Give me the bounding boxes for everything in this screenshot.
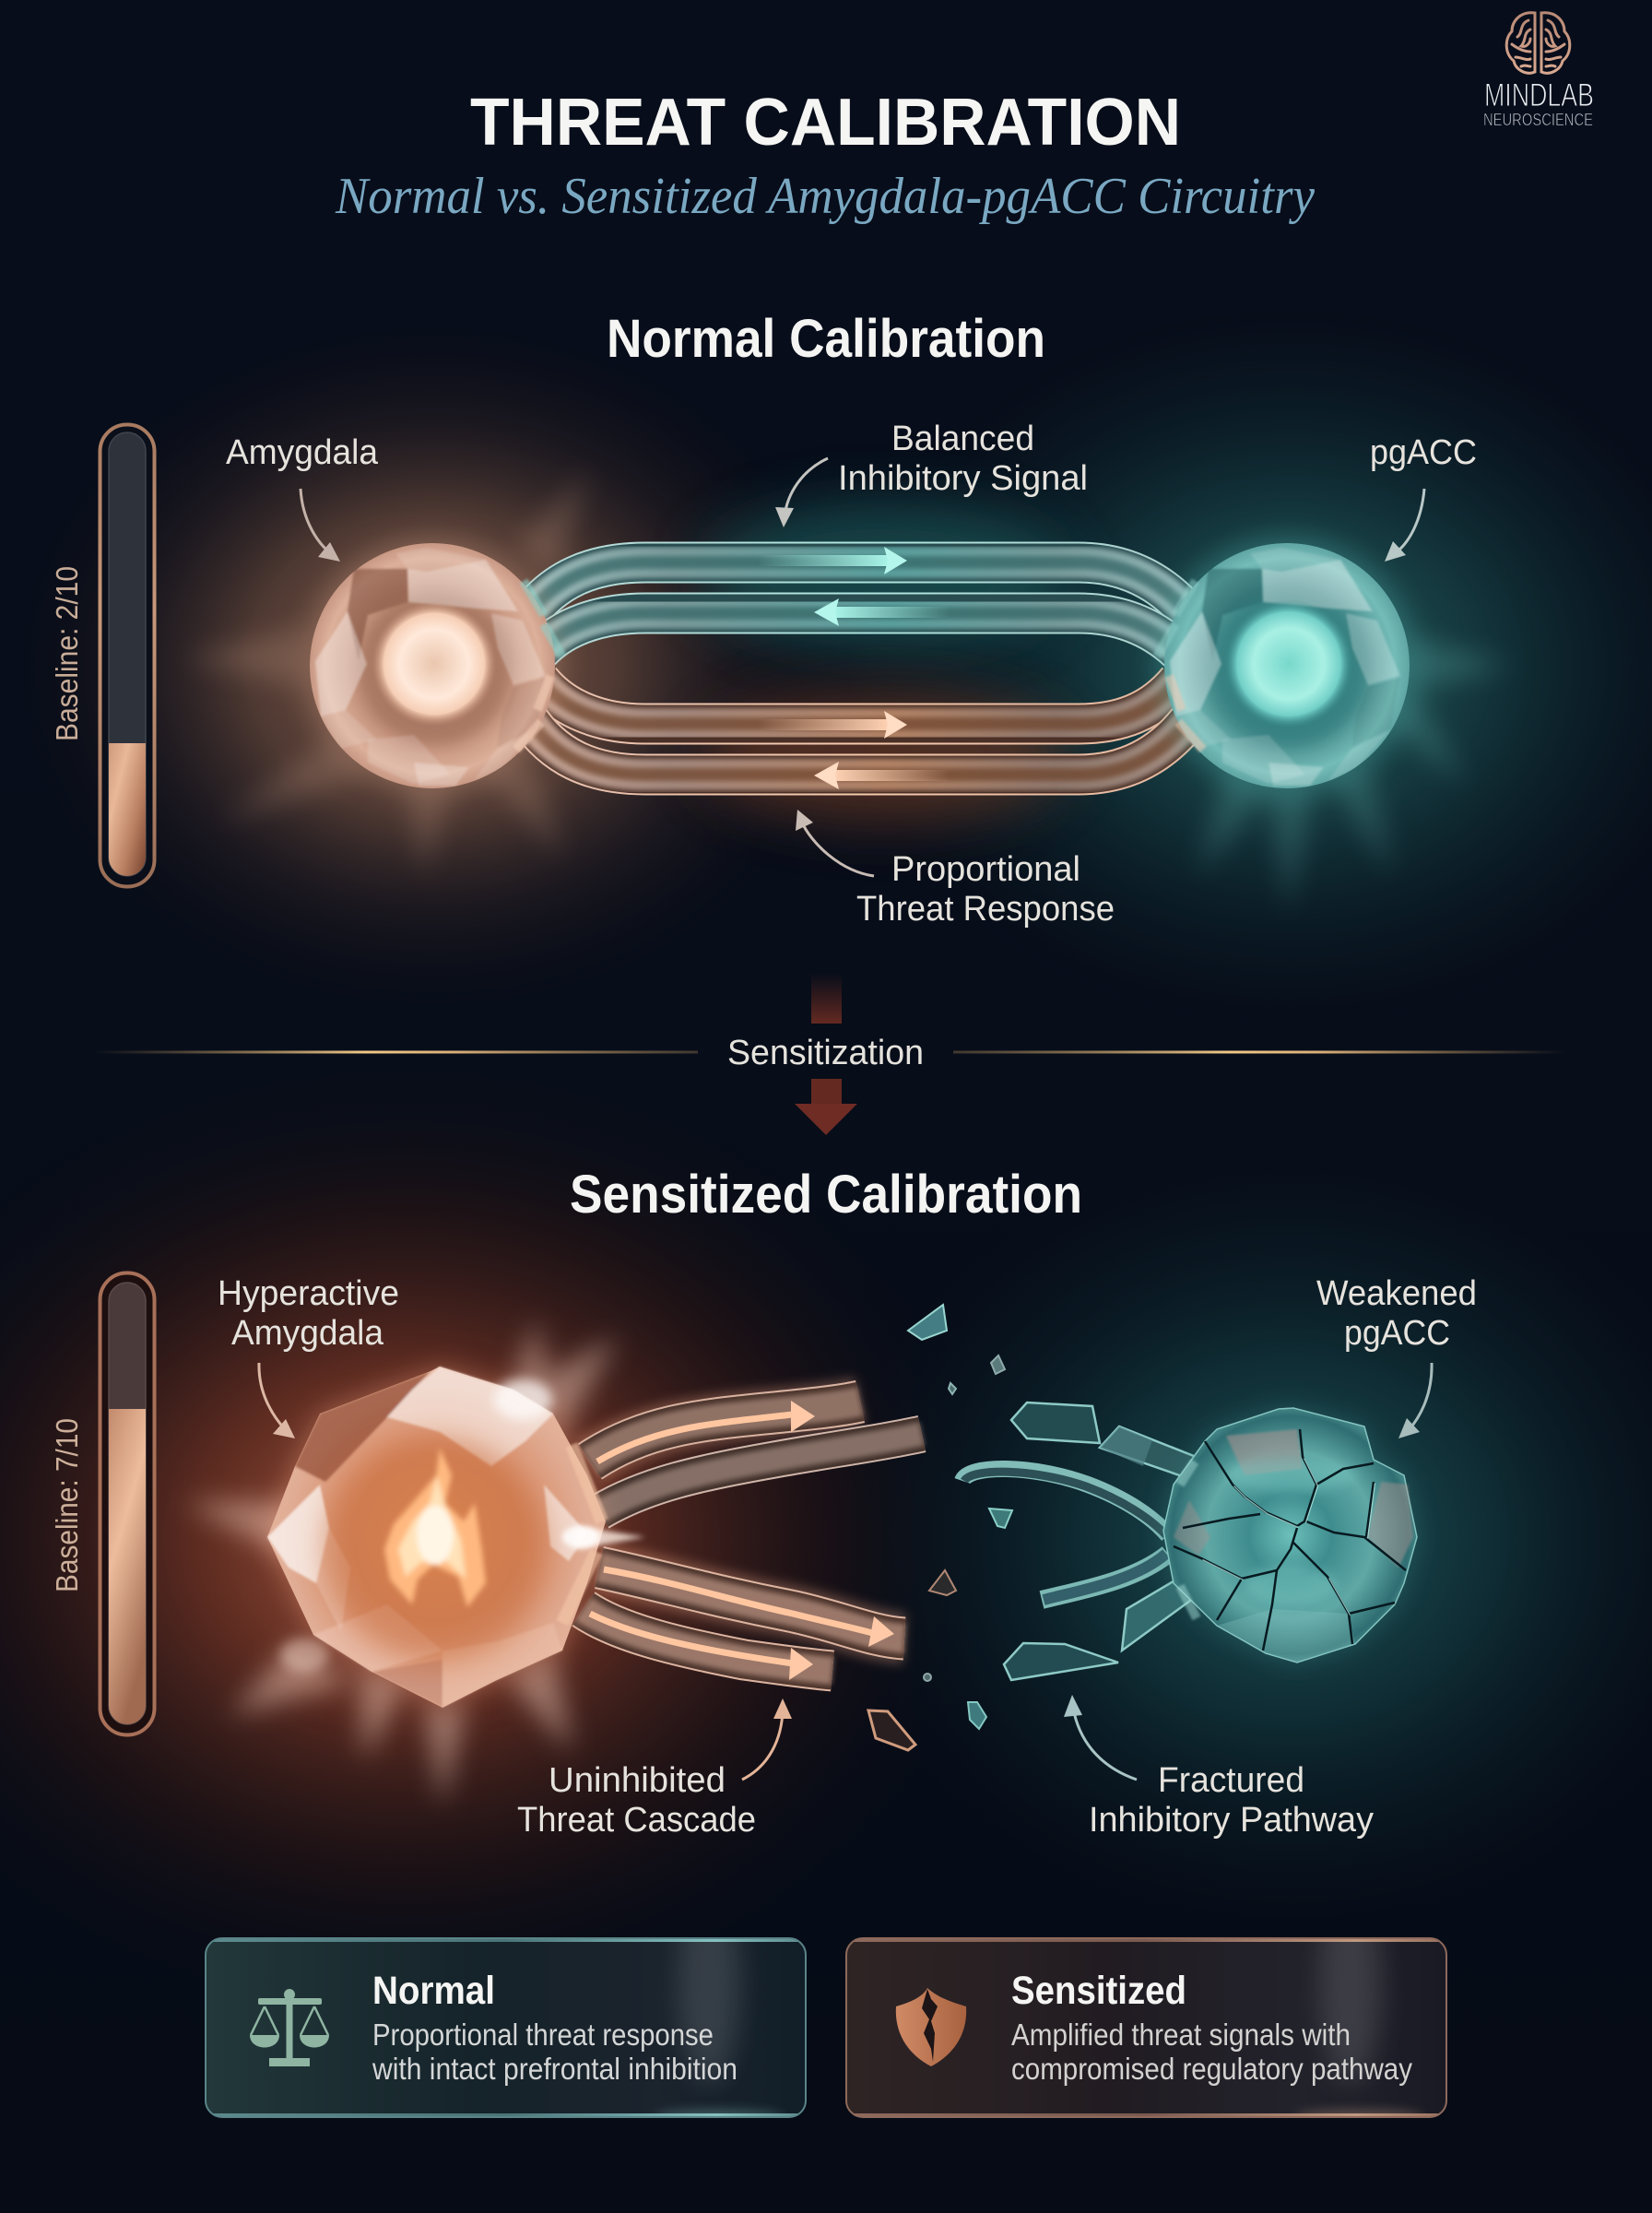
label: fractured inhibitory pathway: [1064, 1695, 1374, 1840]
cracks: [1174, 1429, 1406, 1651]
tube fragment C: [599, 1568, 904, 1647]
tube: fractured inhibitory fragments: [962, 1402, 1204, 1680]
glass shards: [868, 1305, 1012, 1750]
label: fractured inhibitory pathway: Inhibitory Pathway: [1089, 1801, 1374, 1840]
label: amygdala: Amygdala: [226, 433, 379, 472]
arrow: amygdala pointer: [301, 489, 340, 562]
card description: with intact prefrontal inhibition: [372, 2052, 738, 2086]
tube fragment B: [599, 1434, 922, 1512]
arrow: pgACC pointer: [1385, 489, 1424, 562]
card description: Amplified threat signals with: [1011, 2018, 1351, 2052]
label: uninhibited threat cascade: [517, 1698, 792, 1840]
label: weakened pgACC: pgACC: [1344, 1314, 1450, 1353]
baseline gauge: 7/10: [50, 1272, 155, 1735]
label: weakened pgACC: [1316, 1274, 1477, 1438]
arrow: fractured pointer: [1064, 1695, 1137, 1780]
label: balanced inhibitory signal: Inhibitory Signal: [838, 459, 1088, 498]
arrow: sensitization: [795, 973, 857, 1135]
arrow: proportional pointer: [796, 810, 874, 876]
card heading: Sensitized: [1011, 1969, 1186, 2013]
arrow: teal left: [814, 598, 950, 626]
label: hyperactive amygdala: Amygdala: [231, 1314, 384, 1353]
tube fragment A: [590, 1401, 860, 1462]
label: pgACC: [1370, 433, 1477, 562]
card heading: Normal: [372, 1969, 495, 2013]
label: balanced inhibitory signal: [775, 420, 1088, 527]
icon: balance scale: [250, 1989, 329, 2066]
arrow: weakened pointer: [1398, 1363, 1432, 1438]
label: weakened pgACC: Weakened: [1316, 1274, 1477, 1313]
rays: [184, 1319, 618, 1807]
label: proportional threat response: [796, 810, 1115, 929]
panel: normal legend card: [205, 1937, 807, 2118]
diagram: sensitized circuit: [184, 1274, 1477, 1840]
panel: orb rays: [184, 470, 1512, 913]
icon: cracked shield: [896, 1988, 966, 2066]
label: proportional threat response: Proportional: [891, 850, 1080, 889]
divider label: Sensitization: [727, 1034, 924, 1072]
label: uninhibited threat cascade: Uninhibited: [549, 1761, 726, 1800]
connector: amygdala collars: [516, 581, 562, 750]
icon: brain: [1506, 13, 1570, 73]
label: proportional threat response: Threat Response: [856, 890, 1115, 929]
logo subtitle: NEUROSCIENCE: [1483, 111, 1593, 129]
diagram: normal circuit: [184, 420, 1512, 929]
tube fragment D: [584, 1609, 832, 1680]
label: hyperactive amygdala: [218, 1274, 399, 1438]
arrow: copper left: [814, 762, 950, 789]
title: THREAT CALIBRATION: [470, 86, 1181, 160]
heading: sensitized calibration: Sensitized Calibration: [570, 1165, 1082, 1225]
card description: Proportional threat response: [372, 2018, 714, 2052]
orb: weakened pgACC: [1163, 1408, 1417, 1663]
orb: pgACC: [1158, 537, 1416, 795]
panel: sensitized legend card: [845, 1937, 1447, 2118]
card description: [372, 2018, 738, 2086]
arrow: teal right: [758, 547, 907, 574]
logo: [1483, 13, 1594, 129]
label: balanced inhibitory signal: Balanced: [891, 420, 1034, 458]
connector: pgACC collars: [1180, 1462, 1197, 1618]
arrow: copper right: [758, 711, 907, 739]
subtitle: Normal vs. Sensitized Amygdala-pgACC Circuitry: [335, 168, 1315, 225]
card description: compromised regulatory pathway: [1011, 2052, 1412, 2086]
facets: [267, 1367, 587, 1708]
arrow: uninhibited pointer: [742, 1698, 792, 1780]
tube: lower threat: [527, 680, 1191, 775]
flame core: [324, 1438, 546, 1660]
baseline label: Baseline: 2/10: [50, 566, 84, 741]
label: pgACC: pgACC: [1370, 433, 1477, 472]
logo wordmark: MINDLAB: [1484, 77, 1594, 113]
card description: [1011, 2018, 1412, 2086]
tube: upper inhibitory: [527, 562, 1191, 651]
baseline label: Baseline: 7/10: [50, 1418, 84, 1592]
label: fractured inhibitory pathway: Fractured: [1158, 1761, 1304, 1800]
flares: [493, 1379, 552, 1420]
tube: threat cascade fragments: [584, 1401, 922, 1680]
connector: pgACC collars: [1157, 581, 1203, 750]
baseline gauge: 2/10: [50, 424, 155, 887]
divider: sensitization: [92, 973, 1565, 1135]
arrow: hyperactive pointer: [259, 1363, 295, 1438]
connector: hyperactive collars: [562, 1445, 602, 1623]
arrow: balanced pointer: [775, 458, 828, 527]
orb: amygdala: [303, 537, 561, 795]
label: amygdala: [226, 433, 379, 562]
heading: normal calibration: Normal Calibration: [607, 309, 1045, 369]
label: uninhibited threat cascade: Threat Cascade: [517, 1801, 756, 1840]
label: hyperactive amygdala: Hyperactive: [218, 1274, 399, 1313]
orb: hyperactive amygdala: [184, 1319, 645, 1807]
